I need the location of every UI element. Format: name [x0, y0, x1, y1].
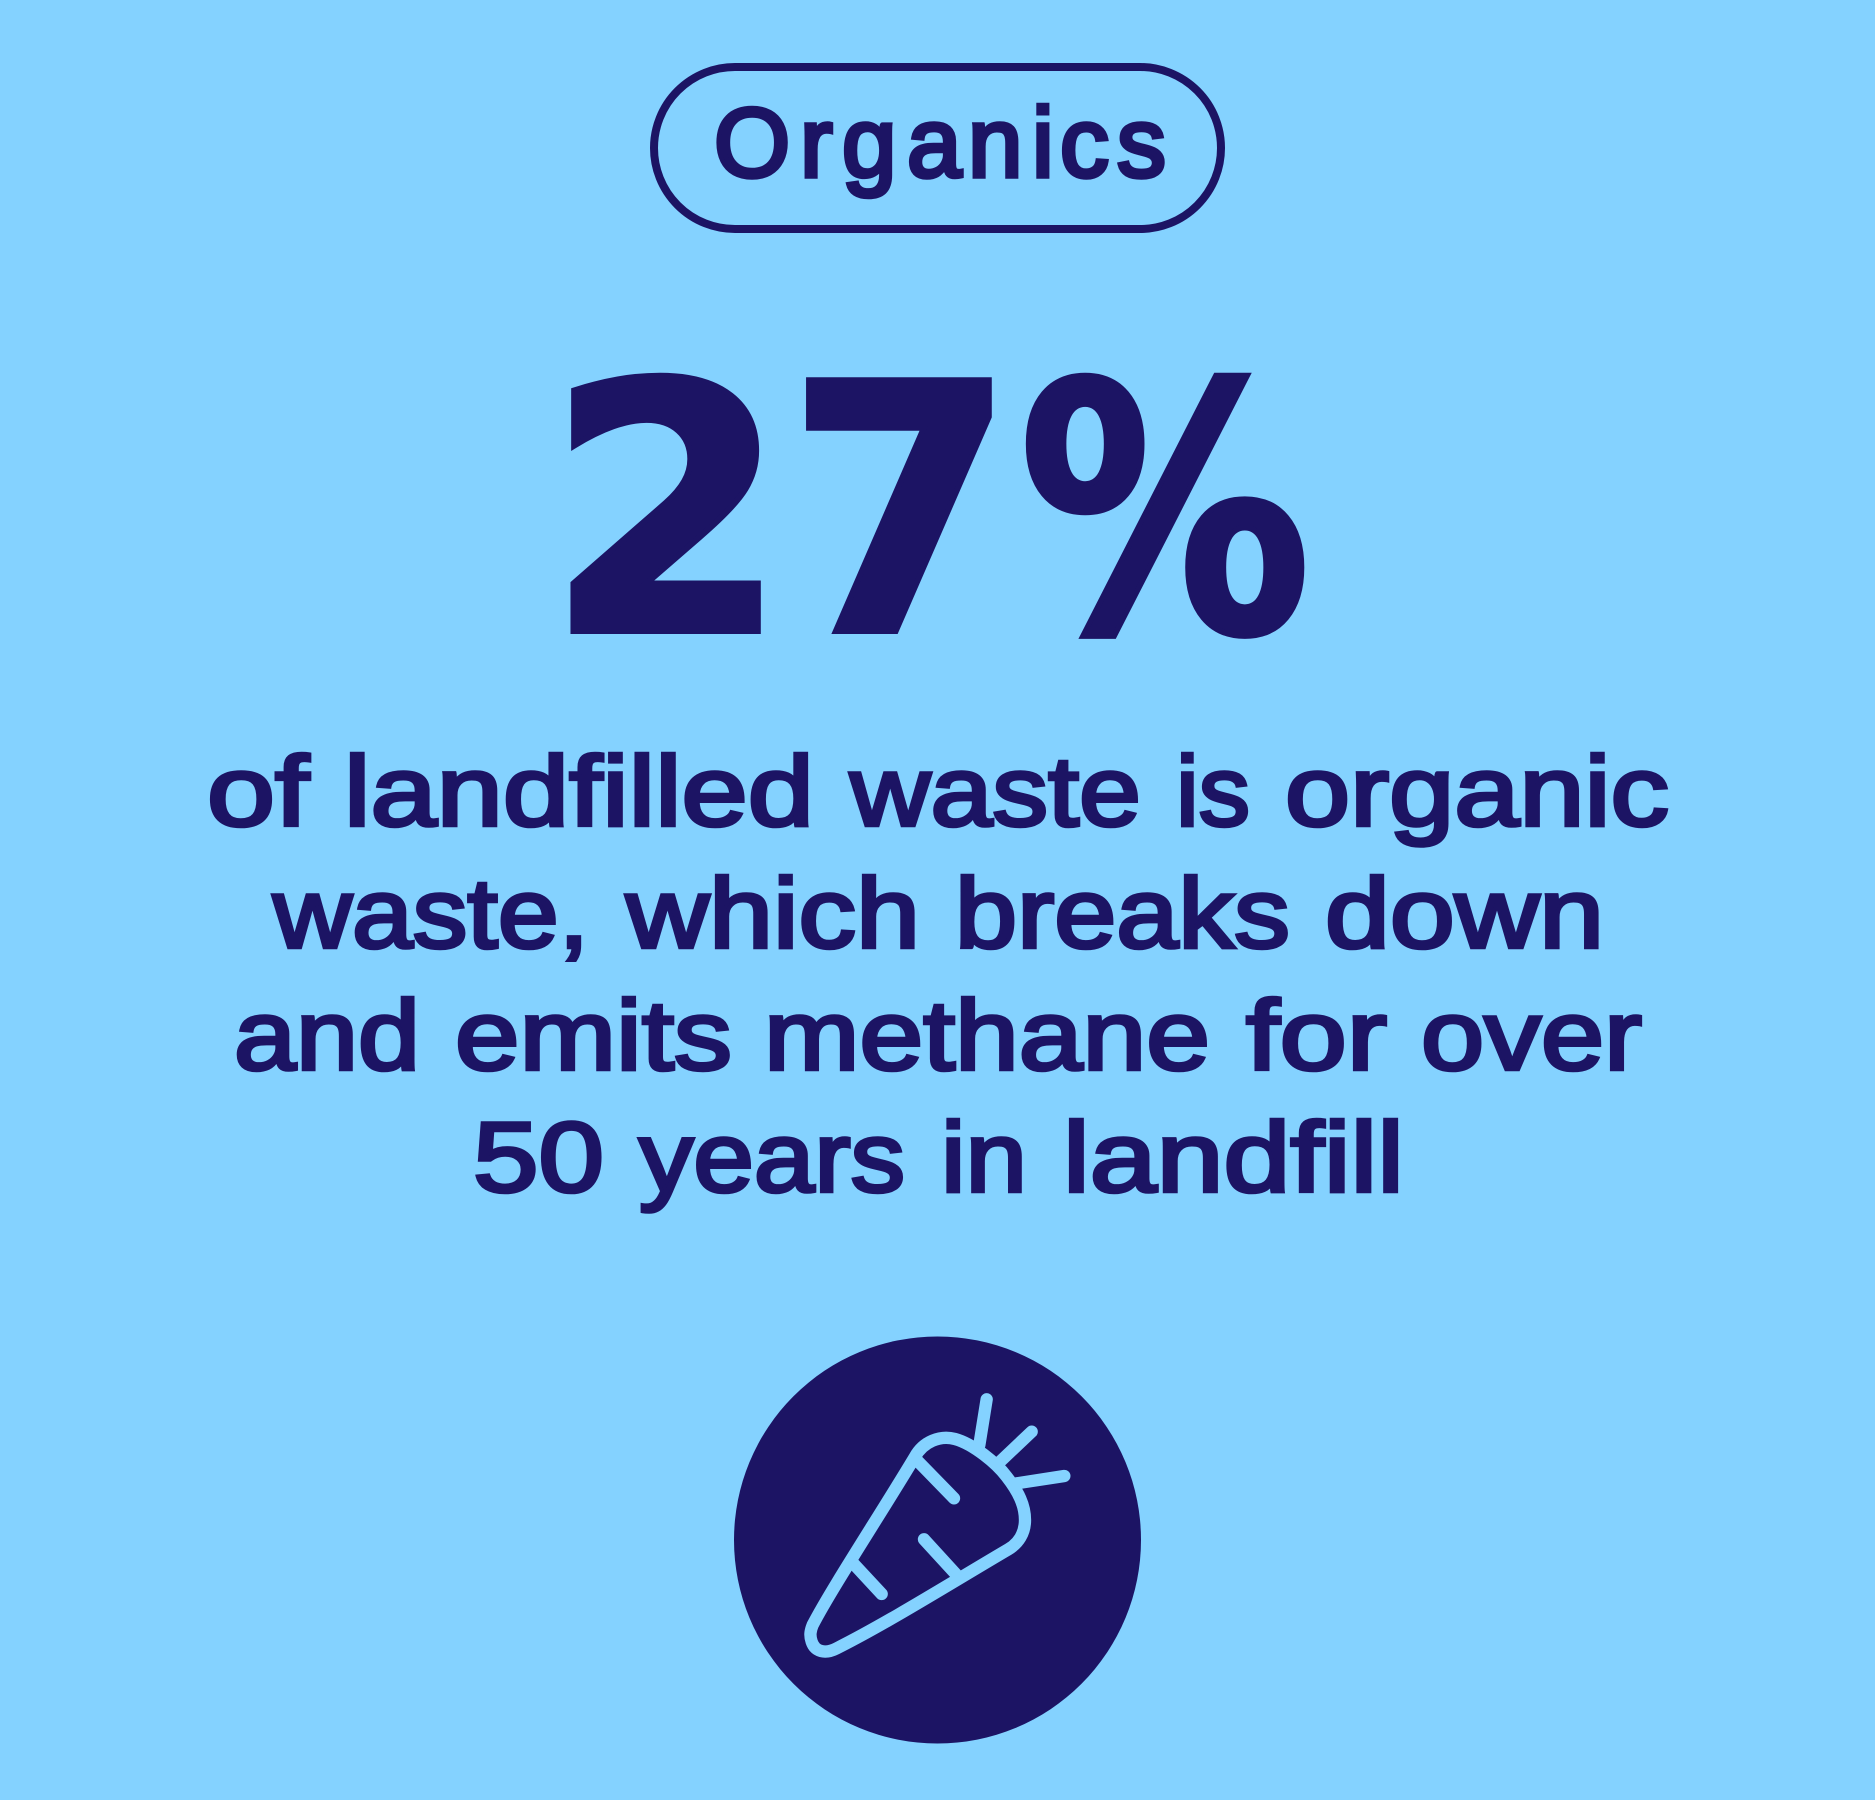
big statistic: 27%	[546, 313, 1311, 713]
description text: over	[1421, 980, 1642, 1090]
description text	[207, 736, 1669, 1212]
description text: for	[1246, 980, 1387, 1090]
big statistic: 27%: %	[1019, 313, 1311, 713]
description text: landfill	[1063, 1102, 1404, 1212]
description text: years	[639, 1102, 905, 1212]
icon: carrot in circle	[734, 1336, 1141, 1744]
pill label: Organics	[654, 67, 1221, 229]
description text: of	[207, 736, 310, 846]
description text: which	[625, 858, 920, 968]
description text: organic	[1285, 736, 1669, 846]
pill label: Organics: Organics	[714, 88, 1166, 198]
description text: in	[941, 1102, 1027, 1212]
description text: methane	[764, 980, 1210, 1090]
description text: down	[1325, 858, 1604, 968]
description text: breaks	[955, 858, 1290, 968]
description text: landfilled	[344, 736, 814, 846]
big statistic: 27%: 7	[787, 313, 1015, 713]
description text: 50	[473, 1102, 604, 1212]
description text: waste	[849, 736, 1141, 846]
description text: emits	[455, 980, 732, 1090]
description text: waste,	[272, 858, 589, 968]
description text: and	[234, 980, 420, 1090]
description text: is	[1176, 736, 1250, 846]
big statistic: 27%: 2	[546, 313, 788, 713]
